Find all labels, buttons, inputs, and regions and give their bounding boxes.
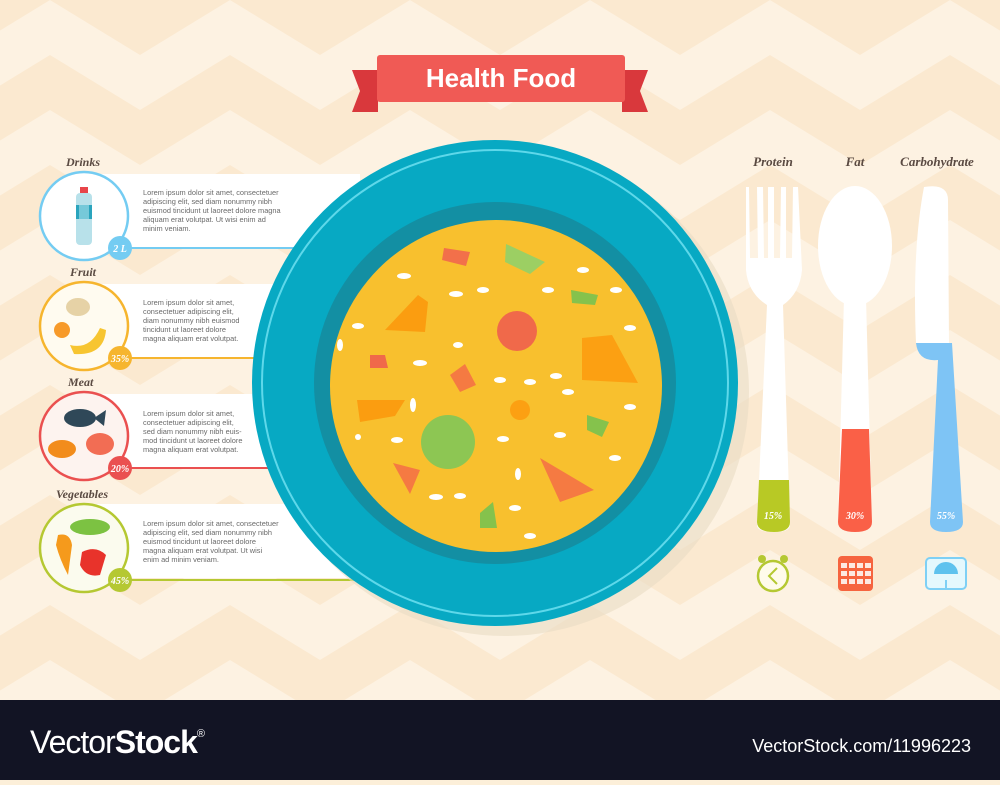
spoon: fat 30% bbox=[818, 186, 892, 532]
panel: drinks: minim veniam. bbox=[143, 224, 191, 233]
footer: VectorStock bbox=[30, 724, 197, 760]
panel: meat: mod tincidunt ut laoreet dolore bbox=[143, 436, 242, 445]
panel: vegetables bbox=[40, 487, 362, 592]
icon: clock bbox=[758, 555, 788, 591]
panel: meat: magna aliquam erat volutpat. bbox=[143, 445, 238, 454]
panel: vegetables: euismod tincidunt ut laoreet dolore bbox=[143, 537, 256, 546]
panel: vegetables: 45% bbox=[110, 576, 129, 587]
panel: fruit bbox=[40, 265, 362, 370]
panel: meat: Meat bbox=[67, 375, 94, 389]
icon: calendar bbox=[838, 556, 873, 591]
panel: fruit: tincidunt ut laoreet dolore bbox=[143, 325, 226, 334]
panel: drinks bbox=[40, 155, 362, 260]
title ribbon: Health Food bbox=[426, 63, 576, 93]
panel: vegetables: enim ad minim veniam. bbox=[143, 555, 219, 564]
spoon: fat 30%: 30% bbox=[845, 511, 864, 522]
panel: fruit: Fruit bbox=[69, 265, 97, 279]
knife: carbohydrate 55% bbox=[915, 186, 963, 532]
footer bbox=[0, 700, 1000, 780]
panel: vegetables: magna aliquam erat volutpat. Ut wisi bbox=[143, 546, 262, 555]
fork: protein 15%: 15% bbox=[764, 511, 782, 522]
panel: fruit: diam nonummy nibh euismod bbox=[143, 316, 240, 325]
panel: fruit: consectetuer adipiscing elit, bbox=[143, 307, 234, 316]
panel: drinks: Drinks bbox=[65, 155, 100, 169]
knife: carbohydrate 55%: 55% bbox=[937, 511, 955, 522]
panel: meat: Lorem ipsum dolor sit amet, bbox=[143, 409, 234, 418]
panel: fruit: Lorem ipsum dolor sit amet, bbox=[143, 298, 234, 307]
panel: meat: consectetuer adipiscing elit, bbox=[143, 418, 234, 427]
panel: meat bbox=[40, 375, 362, 480]
panel: fruit: 35% bbox=[110, 354, 129, 365]
nutrient headings: Carbohydrate bbox=[900, 154, 974, 169]
footer: ® bbox=[197, 728, 205, 740]
fork: protein 15% bbox=[746, 187, 802, 532]
panel: fruit: magna aliquam erat volutpat. bbox=[143, 334, 238, 343]
nutrient headings bbox=[753, 154, 974, 169]
icon: fish and meat bbox=[48, 409, 114, 458]
panel: drinks: euismod tincidunt ut laoreet dolore magna bbox=[143, 206, 282, 215]
panel: drinks: aliquam erat volutpat. Ut wisi enim ad bbox=[143, 215, 266, 224]
plate bbox=[252, 140, 749, 636]
nutrient headings: Fat bbox=[845, 154, 865, 169]
panel: meat: 20% bbox=[110, 464, 129, 475]
nutrient headings: Protein bbox=[753, 154, 793, 169]
icon: fruits bbox=[54, 298, 106, 354]
footer: VectorStock.com/11996223 bbox=[752, 736, 971, 756]
panel: vegetables: Vegetables bbox=[56, 487, 108, 501]
panel: drinks: 2 L bbox=[112, 244, 127, 255]
panel: drinks: Lorem ipsum dolor sit amet, consectetuer bbox=[143, 188, 279, 197]
panel: meat: sed diam nonummy nibh euis- bbox=[143, 427, 242, 436]
icon: scale bbox=[926, 558, 966, 589]
soup bbox=[330, 220, 662, 552]
icon: bottle bbox=[76, 187, 92, 245]
panel: vegetables: adipiscing elit, sed diam nonummy nibh bbox=[143, 528, 272, 537]
panel: drinks: adipiscing elit, sed diam nonummy nibh bbox=[143, 197, 272, 206]
panel: vegetables: Lorem ipsum dolor sit amet, consectetuer bbox=[143, 519, 279, 528]
icon: vegetables bbox=[56, 519, 110, 576]
title ribbon bbox=[352, 55, 648, 112]
